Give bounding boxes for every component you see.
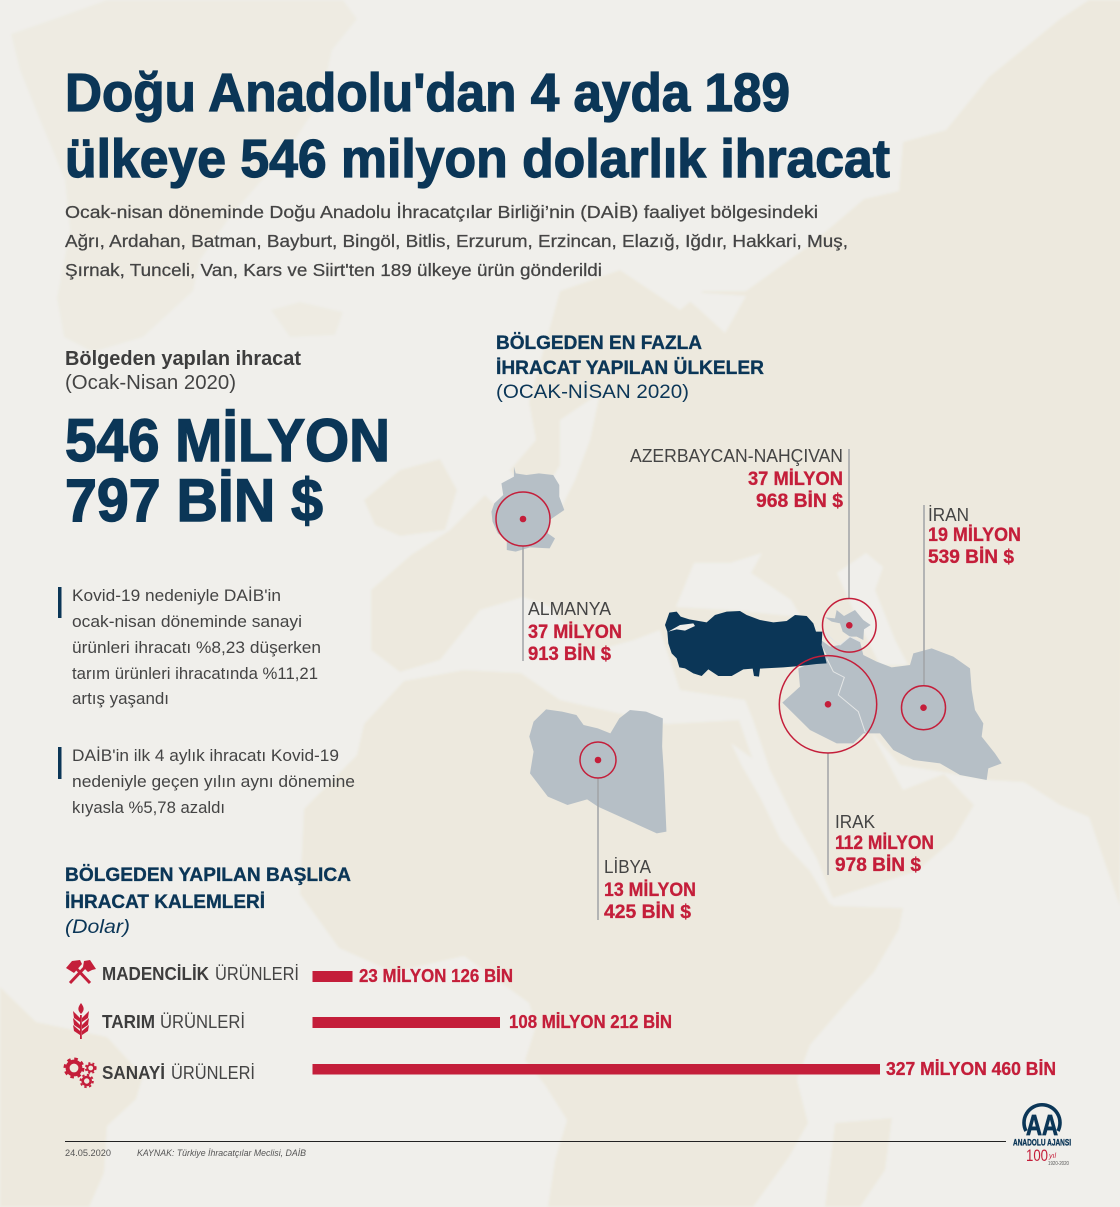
footer: KAYNAK: Türkiye İhracatçılar Meclisi, DAİB	[137, 1148, 307, 1159]
row label: industry: SANAYİ	[102, 1063, 165, 1083]
label: Iraq: 112 MİLYON	[835, 833, 934, 854]
label: Germany	[528, 599, 622, 665]
label: Germany: 913 BİN $	[528, 644, 611, 665]
label: Libya	[604, 857, 696, 923]
subtitle	[65, 202, 848, 280]
export items heading: (Dolar)	[65, 917, 130, 938]
note: overall decline: DAİB'in ilk 4 aylık ihracatı Kovid-19	[72, 746, 339, 765]
row label: agriculture: TARIM	[102, 1012, 155, 1032]
row label: mining: MADENCİLİK	[102, 964, 209, 984]
label: Iraq	[835, 812, 934, 876]
row label: mining	[102, 964, 299, 984]
row label: industry: ÜRÜNLERİ	[171, 1063, 255, 1083]
Turkey shape	[665, 611, 827, 677]
title: ülkeye 546 milyon dolarlık ihracat	[65, 129, 890, 189]
note: sector change: tarım ürünleri ihracatında %11,21	[72, 665, 318, 683]
label: Azerbaijan: 968 BİN $	[756, 491, 843, 512]
label: Iran: İRAN	[928, 505, 969, 525]
logo: Anadolu Ajansı: ANADOLU AJANSI	[1013, 1138, 1071, 1148]
total export heading: Bölgeden yapılan ihracat	[65, 348, 301, 370]
icon: crossed hammers	[66, 960, 96, 983]
label: Libya: LİBYA	[604, 857, 651, 877]
map: Germany and Libya shapes	[491, 467, 666, 833]
subtitle: Ağrı, Ardahan, Batman, Bayburt, Bingöl, Bitlis, Erzurum, Erzincan, Elazığ, Iğdır, Hakkari, Muş,	[65, 231, 848, 251]
map: country markers	[496, 492, 946, 778]
total export figure	[65, 407, 390, 534]
map: Turkey and neighbours	[665, 610, 1002, 780]
note: overall decline: nedeniyle geçen yılın aynı dönemine	[72, 773, 355, 791]
top countries heading	[496, 333, 764, 403]
total export heading	[65, 348, 301, 394]
subtitle: Şırnak, Tunceli, Van, Kars ve Siirt'ten 189 ülkeye ürün gönderildi	[65, 260, 602, 280]
label: Germany: 37 MİLYON	[528, 622, 622, 643]
total export figure: 797 BİN $	[65, 467, 323, 534]
note: sector change: ocak-nisan döneminde sanayi	[72, 613, 302, 631]
note: sector change: artış yaşandı	[72, 690, 169, 708]
top countries heading: (OCAK-NİSAN 2020)	[496, 382, 689, 403]
footer	[65, 1141, 1006, 1159]
bar chart: export items: 108 MİLYON 212 BİN	[509, 1012, 672, 1032]
top countries heading: İHRACAT YAPILAN ÜLKELER	[496, 358, 764, 379]
label: Libya: 13 MİLYON	[604, 880, 696, 901]
footer: 24.05.2020	[65, 1148, 111, 1159]
Libya shape	[529, 709, 666, 833]
bar chart: export items: 23 MİLYON 126 BİN	[359, 966, 513, 986]
label: Iraq: 978 BİN $	[835, 855, 921, 876]
Azerbaijan-Iran border	[826, 633, 860, 645]
logo: Anadolu Ajansı: 100	[1026, 1146, 1048, 1165]
Marmara sea	[668, 623, 695, 632]
label: Iran: 19 MİLYON	[928, 525, 1021, 546]
map: leader lines	[523, 449, 924, 920]
note: sector change: ürünleri ihracatı %8,23 düşerken	[72, 639, 321, 657]
total export figure: 546 MİLYON	[65, 407, 390, 474]
row label: mining: ÜRÜNLERİ	[215, 964, 299, 984]
label: Iran	[928, 505, 1021, 568]
total export heading: (Ocak-Nisan 2020)	[65, 372, 236, 394]
icon: wheat	[73, 1003, 89, 1039]
label: Iran: 539 BİN $	[928, 547, 1014, 568]
label: Germany: ALMANYA	[528, 599, 611, 619]
bar chart: export items	[312, 966, 1056, 1079]
Azerbaijan shape	[825, 610, 871, 640]
export items heading: BÖLGEDEN YAPILAN BAŞLICA	[65, 865, 351, 886]
export items heading: İHRACAT KALEMLERİ	[65, 892, 265, 913]
top countries heading: BÖLGEDEN EN FAZLA	[496, 333, 702, 354]
title	[65, 63, 890, 189]
bar chart: export items: 327 MİLYON 460 BİN	[886, 1059, 1056, 1079]
label: Azerbaijan: 37 MİLYON	[748, 469, 843, 490]
export items heading	[65, 865, 351, 938]
logo: Anadolu Ajansı: 1920-2020	[1048, 1161, 1069, 1167]
label: Azerbaijan: AZERBAYCAN-NAHÇIVAN	[630, 446, 843, 466]
label: Azerbaijan	[630, 446, 843, 512]
subtitle: Ocak-nisan döneminde Doğu Anadolu İhracatçılar Birliği’nin (DAİB) faaliyet bölgesindeki	[65, 202, 818, 222]
title: Doğu Anadolu'dan 4 ayda 189	[65, 63, 790, 123]
Germany shape	[491, 467, 564, 552]
note: sector change	[58, 586, 321, 708]
row label: industry	[102, 1063, 255, 1083]
logo: Anadolu Ajansı	[1013, 1105, 1071, 1167]
note: overall decline: kıyasla %5,78 azaldı	[72, 799, 225, 817]
logo: Anadolu Ajansı: yıl	[1048, 1153, 1056, 1160]
note: overall decline	[58, 746, 355, 817]
label: Libya: 425 BİN $	[604, 902, 691, 923]
icon: gears	[65, 1059, 96, 1087]
label: Iraq: IRAK	[835, 812, 875, 832]
row label: agriculture: ÜRÜNLERİ	[160, 1012, 245, 1032]
logo: Anadolu Ajansı: AA	[1026, 1110, 1058, 1142]
Iraq and Iran shape	[782, 637, 1002, 780]
row label: agriculture	[102, 1012, 245, 1032]
Iraq-Iran border	[827, 658, 868, 733]
note: sector change: Kovid-19 nedeniyle DAİB'in	[72, 586, 281, 605]
